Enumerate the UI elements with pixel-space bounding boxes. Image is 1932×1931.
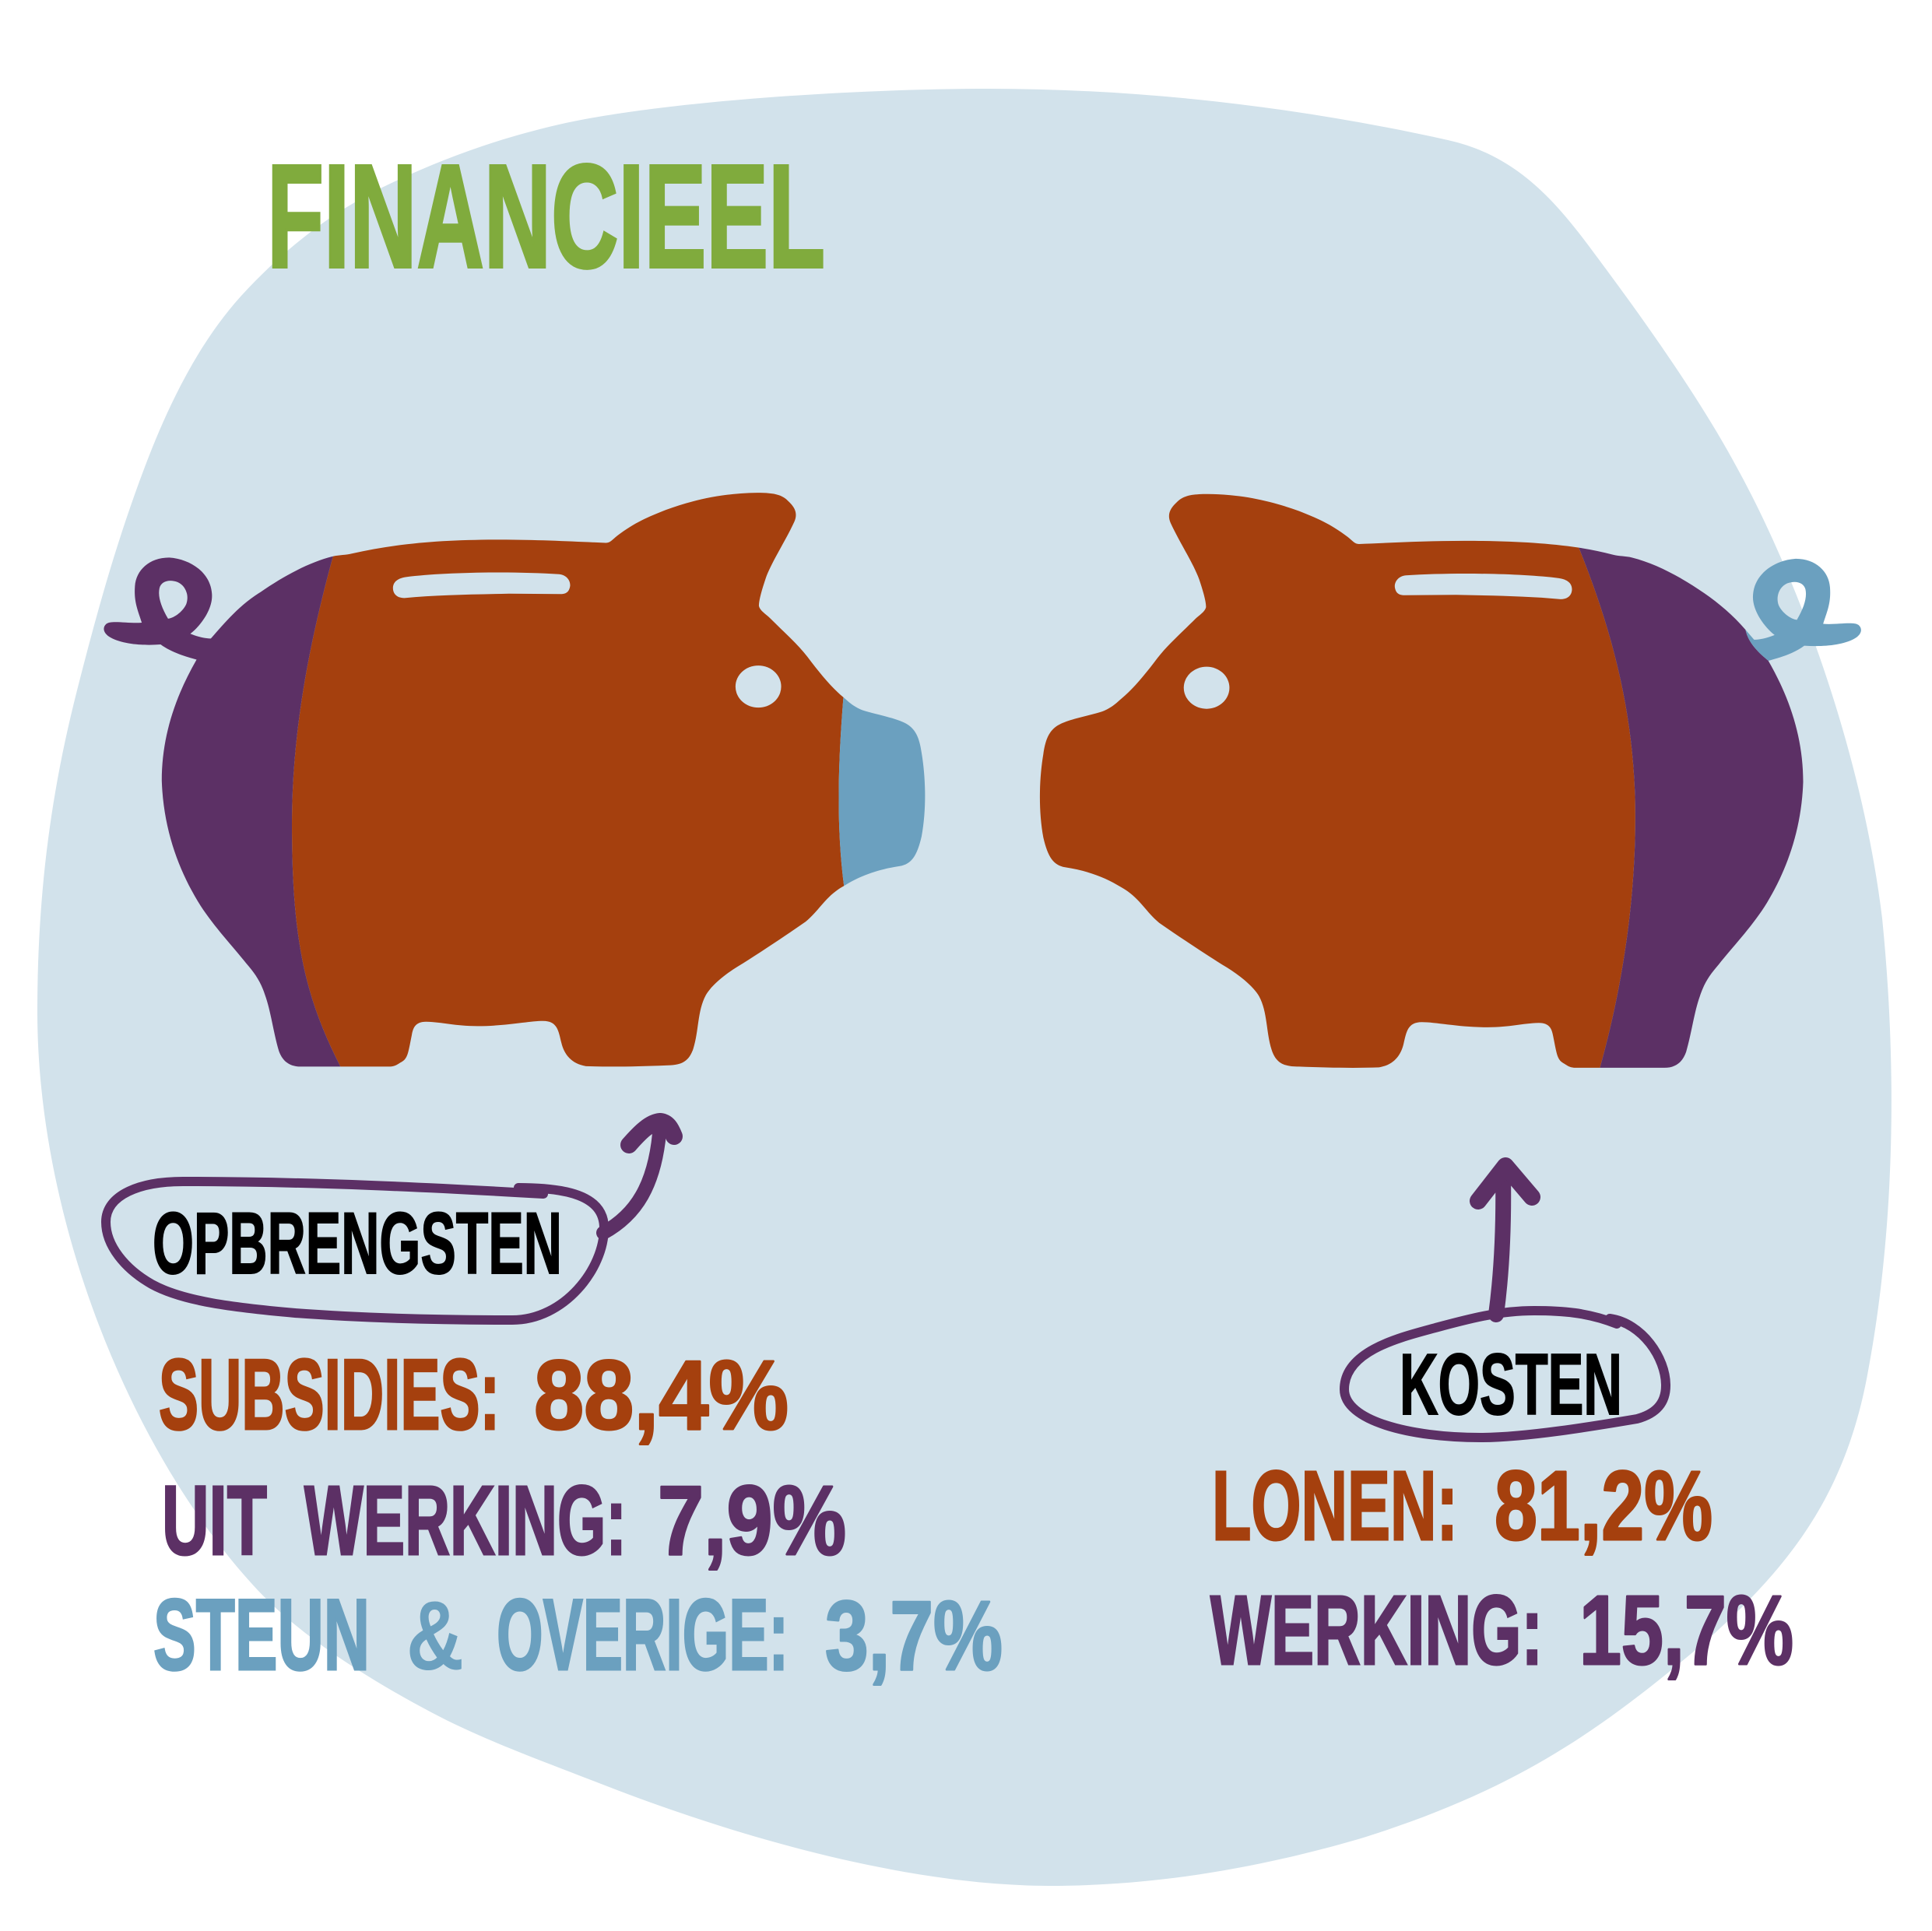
arrow head <box>629 1122 674 1145</box>
pig rear and tail: uit werking share <box>104 556 340 1066</box>
werking line: 15,7% <box>1579 1575 1793 1685</box>
coin slot <box>1395 574 1572 599</box>
steun en overige line: STEUN <box>153 1578 370 1691</box>
coin slot <box>393 572 570 598</box>
arrow shaft to left pig <box>603 1124 660 1233</box>
pig tail <box>1745 559 1861 661</box>
icon: right piggy bank (kosten) <box>1040 494 1861 1068</box>
uit werking line: UIT <box>162 1466 267 1575</box>
label: opbrengsten: OPBRENGSTEN <box>153 1195 562 1292</box>
callout: kosten bubble with arrow <box>1344 1166 1666 1438</box>
text block: kosten figures <box>1210 1451 1793 1685</box>
steun en overige line: OVERIGE: <box>497 1578 789 1691</box>
lonen line: LONEN: <box>1212 1451 1458 1561</box>
label: kosten: KOSTEN <box>1400 1336 1622 1433</box>
callout: opbrengsten bubble with arrow <box>106 1122 674 1320</box>
hand-drawn bubble outline <box>1344 1311 1666 1438</box>
steun en overige line: & <box>406 1581 464 1691</box>
subsidies line: 88,4% <box>534 1340 789 1450</box>
pig rear: werking share <box>1579 548 1803 1068</box>
eye <box>1184 667 1229 709</box>
arrow shaft to right pig <box>1496 1175 1503 1315</box>
pig snout: steun share <box>839 697 925 886</box>
pig body: subsidies share <box>292 493 844 1066</box>
subsidies line: SUBSIDIES: <box>159 1339 500 1451</box>
pig body: lonen share <box>1040 494 1635 1068</box>
icon: left piggy bank (opbrengsten) <box>104 493 925 1066</box>
text block: opbrengsten figures <box>153 1339 1003 1691</box>
uit werking line: 7,9% <box>658 1466 846 1575</box>
uit werking line: WERKING: <box>304 1466 627 1575</box>
steun en overige line <box>153 1578 1003 1691</box>
arrow head <box>1478 1166 1532 1201</box>
werking line: WERKING: <box>1210 1575 1543 1685</box>
title: FINANCIEEL <box>267 135 825 299</box>
steun en overige line: 3,7% <box>825 1581 1003 1691</box>
eye <box>736 665 782 707</box>
hand-drawn bubble outline <box>106 1181 604 1320</box>
lonen line: 81,2% <box>1495 1451 1712 1561</box>
